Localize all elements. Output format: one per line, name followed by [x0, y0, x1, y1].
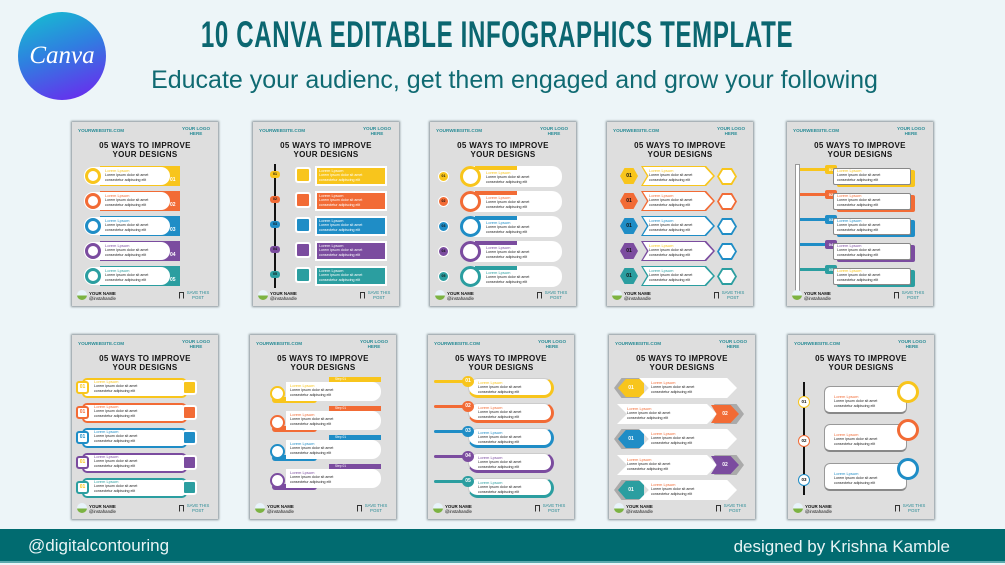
- card 9: Lorem Lpsum: [627, 406, 651, 411]
- card 7: YOURWEBSITE.COM: [256, 341, 302, 346]
- card 9: SAVE THIS POST: [724, 503, 746, 513]
- card 5: consectetur adipiscing elit: [837, 278, 878, 282]
- card 8: 05: [465, 478, 471, 484]
- card 1: consectetur adipiscing elit: [105, 278, 146, 282]
- card 2: 02: [273, 197, 277, 201]
- card 1: @instahandle: [89, 296, 116, 301]
- card 5: consectetur adipiscing elit: [837, 178, 878, 182]
- card 2: YOURWEBSITE.COM: [259, 128, 305, 133]
- card 1: Lorem ipsum dolor sit amet: [105, 223, 148, 227]
- card 3: SAVE THIS POST: [545, 290, 567, 300]
- card 6: Lorem Lpsum: [94, 404, 118, 409]
- footer: handle: @digitalcontouring: [28, 536, 169, 555]
- card 3: 03: [442, 224, 445, 228]
- card 3: consectetur adipiscing elit: [486, 205, 527, 209]
- card 6: @instahandle: [89, 509, 116, 514]
- card 6: Lorem Lpsum: [94, 379, 118, 384]
- card 4: consectetur adipiscing elit: [649, 228, 690, 232]
- card 10: YOUR LOGO HERE: [898, 339, 926, 349]
- card 3: Lorem ipsum dolor sit amet: [486, 275, 529, 279]
- card 1: YOUR DESIGNS: [113, 150, 177, 159]
- card 1: Lorem ipsum dolor sit amet: [105, 198, 148, 202]
- card 2: YOUR DESIGNS: [294, 150, 358, 159]
- card 2: Lorem ipsum dolor sit amet: [319, 198, 362, 202]
- card 3: Lorem ipsum dolor sit amet: [486, 250, 529, 254]
- card 1: [72, 122, 218, 306]
- card 2: [253, 122, 399, 306]
- card 9: Lorem ipsum dolor sit amet: [651, 487, 694, 491]
- card 5: 01: [829, 167, 833, 172]
- card 9: Lorem Lpsum: [627, 457, 651, 462]
- card 7: Lorem ipsum dolor sit amet: [290, 417, 333, 421]
- card 9: Lorem ipsum dolor sit amet: [627, 411, 670, 415]
- card 5: consectetur adipiscing elit: [837, 253, 878, 257]
- card 1: SAVE THIS POST: [187, 290, 209, 300]
- card 8: consectetur adipiscing elit: [478, 465, 519, 469]
- card 3: consectetur adipiscing elit: [486, 230, 527, 234]
- card 5: @instahandle: [804, 296, 831, 301]
- card 8: Lorem Lpsum: [478, 380, 502, 385]
- card 1: Lorem ipsum dolor sit amet: [105, 248, 148, 252]
- card 7: Step 01: [335, 435, 346, 439]
- card 3: 05: [442, 274, 445, 278]
- card 10: Lorem Lpsum: [834, 394, 858, 399]
- card 5: Lorem ipsum dolor sit amet: [837, 223, 880, 227]
- card 2: 05: [273, 272, 277, 276]
- card 6: YOURWEBSITE.COM: [78, 341, 124, 346]
- card 2: Lorem ipsum dolor sit amet: [319, 248, 362, 252]
- card 6: consectetur adipiscing elit: [94, 439, 135, 443]
- card 3: 02: [442, 199, 445, 203]
- card 4: 01: [626, 173, 632, 179]
- card 6: Lorem ipsum dolor sit amet: [94, 384, 137, 388]
- card 7: Lorem Lpsum: [290, 412, 314, 417]
- card 8: consectetur adipiscing elit: [478, 440, 519, 444]
- card 2: consectetur adipiscing elit: [319, 178, 360, 182]
- card 5: YOURWEBSITE.COM: [793, 128, 839, 133]
- card 5: Lorem ipsum dolor sit amet: [837, 248, 880, 252]
- card 3: Lorem Lpsum: [486, 170, 510, 175]
- card 7: consectetur adipiscing elit: [290, 480, 331, 484]
- card 3: [430, 122, 576, 306]
- card 10: YOUR DESIGNS: [829, 363, 893, 372]
- card 4: Lorem ipsum dolor sit amet: [649, 223, 692, 227]
- card 7: YOUR DESIGNS: [291, 363, 355, 372]
- card 9: YOUR NAME: [626, 504, 653, 509]
- card 7: Lorem Lpsum: [290, 441, 314, 446]
- card 9: [609, 335, 755, 519]
- card 3: Lorem Lpsum: [486, 220, 510, 225]
- card 6: 01: [80, 484, 85, 490]
- card 10: [788, 335, 934, 519]
- card 6: consectetur adipiscing elit: [94, 464, 135, 468]
- card 10: Lorem Lpsum: [834, 432, 858, 437]
- card 3: Lorem Lpsum: [486, 245, 510, 250]
- card 10: 02: [801, 438, 806, 443]
- card 2: Lorem ipsum dolor sit amet: [319, 273, 362, 277]
- card 5: Lorem ipsum dolor sit amet: [837, 173, 880, 177]
- card 4: 05 WAYS TO IMPROVE: [634, 141, 726, 150]
- card 8: YOUR NAME: [445, 504, 472, 509]
- card 7: consectetur adipiscing elit: [290, 393, 331, 397]
- card 8: Lorem ipsum dolor sit amet: [478, 460, 521, 464]
- card 5: SAVE THIS POST: [902, 290, 924, 300]
- card 2: 03: [273, 222, 277, 226]
- card 3: Lorem Lpsum: [486, 195, 510, 200]
- card 4: Lorem ipsum dolor sit amet: [649, 248, 692, 252]
- card 4: YOUR DESIGNS: [648, 150, 712, 159]
- card 2: Lorem ipsum dolor sit amet: [319, 173, 362, 177]
- card 8: 05 WAYS TO IMPROVE: [455, 354, 547, 363]
- card 6: 01: [80, 409, 85, 415]
- card 7: YOUR LOGO HERE: [360, 339, 388, 349]
- card 8: SAVE THIS POST: [543, 503, 565, 513]
- card 4: consectetur adipiscing elit: [649, 203, 690, 207]
- card 4: Lorem ipsum dolor sit amet: [649, 198, 692, 202]
- card 5: Lorem ipsum dolor sit amet: [837, 198, 880, 202]
- card 8: Lorem ipsum dolor sit amet: [478, 435, 521, 439]
- card 3: 05 WAYS TO IMPROVE: [457, 141, 549, 150]
- card 7: consectetur adipiscing elit: [290, 422, 331, 426]
- card 8: consectetur adipiscing elit: [478, 415, 519, 419]
- card 3: @instahandle: [447, 296, 474, 301]
- card 5: 02: [829, 192, 833, 197]
- card 5: Lorem Lpsum: [837, 218, 861, 223]
- card 6: YOUR LOGO HERE: [182, 339, 210, 349]
- icon: canva logo: Canva: [29, 42, 95, 69]
- card 9: YOURWEBSITE.COM: [615, 341, 661, 346]
- card 9: 01: [628, 436, 634, 442]
- card 1: 02: [170, 202, 176, 208]
- card 8: Lorem Lpsum: [478, 480, 502, 485]
- card 8: 04: [465, 453, 471, 459]
- card 3: consectetur adipiscing elit: [486, 255, 527, 259]
- card 4: 01: [626, 223, 632, 229]
- card 1: 03: [170, 227, 176, 233]
- card 10: @instahandle: [805, 509, 832, 514]
- card 4: Lorem Lpsum: [649, 218, 673, 223]
- card 9: Lorem ipsum dolor sit amet: [627, 462, 670, 466]
- card 8: YOUR LOGO HERE: [538, 339, 566, 349]
- card 9: Lorem Lpsum: [651, 431, 675, 436]
- card 10: Lorem ipsum dolor sit amet: [834, 399, 877, 403]
- card 5: YOUR NAME: [804, 291, 831, 296]
- card 3: YOUR NAME: [447, 291, 474, 296]
- card 4: Lorem Lpsum: [649, 193, 673, 198]
- card 10: YOUR NAME: [805, 504, 832, 509]
- card 5: YOUR LOGO HERE: [897, 126, 925, 136]
- card 6: Lorem ipsum dolor sit amet: [94, 409, 137, 413]
- card 4: YOUR NAME: [624, 291, 651, 296]
- card 6: Lorem Lpsum: [94, 479, 118, 484]
- card 1: consectetur adipiscing elit: [105, 228, 146, 232]
- card 1: YOUR NAME: [89, 291, 116, 296]
- card 2: Lorem ipsum dolor sit amet: [319, 223, 362, 227]
- card 5: consectetur adipiscing elit: [837, 203, 878, 207]
- card 7: Lorem ipsum dolor sit amet: [290, 388, 333, 392]
- card 10: Lorem ipsum dolor sit amet: [834, 476, 877, 480]
- card 9: 01: [628, 487, 634, 493]
- card 1: YOURWEBSITE.COM: [78, 128, 124, 133]
- card 3: 04: [442, 249, 445, 253]
- card 9: Lorem Lpsum: [651, 482, 675, 487]
- card 5: 05: [829, 267, 833, 272]
- card 1: consectetur adipiscing elit: [105, 253, 146, 257]
- card 9: YOUR LOGO HERE: [719, 339, 747, 349]
- card 1: consectetur adipiscing elit: [105, 203, 146, 207]
- card 6: 01: [80, 434, 85, 440]
- card 7: Step 01: [335, 377, 346, 381]
- card 4: 01: [626, 248, 632, 254]
- card 2: YOUR LOGO HERE: [363, 126, 391, 136]
- card 2: consectetur adipiscing elit: [319, 253, 360, 257]
- card 10: Lorem Lpsum: [834, 471, 858, 476]
- card 5: Lorem ipsum dolor sit amet: [837, 273, 880, 277]
- card 8: @instahandle: [445, 509, 472, 514]
- card 10: YOURWEBSITE.COM: [794, 341, 840, 346]
- card 6: 01: [80, 459, 85, 465]
- card 2: 04: [273, 247, 277, 251]
- card 8: 01: [465, 378, 471, 384]
- card 4: Lorem Lpsum: [649, 243, 673, 248]
- card 6: consectetur adipiscing elit: [94, 489, 135, 493]
- card 3: Lorem ipsum dolor sit amet: [486, 200, 529, 204]
- card 1: YOUR LOGO HERE: [182, 126, 210, 136]
- subtitle: Educate your audienc, get them engaged and grow your following: [151, 66, 878, 94]
- card 8: consectetur adipiscing elit: [478, 490, 519, 494]
- card 4: consectetur adipiscing elit: [649, 253, 690, 257]
- card 6: Lorem ipsum dolor sit amet: [94, 459, 137, 463]
- card 6: YOUR DESIGNS: [113, 363, 177, 372]
- card 7: consectetur adipiscing elit: [290, 451, 331, 455]
- card 2: Lorem Lpsum: [319, 193, 343, 198]
- card 7: @instahandle: [267, 509, 294, 514]
- card 1: Lorem Lpsum: [105, 268, 129, 273]
- card 9: 01: [628, 385, 634, 391]
- card 2: SAVE THIS POST: [368, 290, 390, 300]
- card 4: Lorem ipsum dolor sit amet: [649, 173, 692, 177]
- card 8: 02: [465, 403, 471, 409]
- card 6: 05 WAYS TO IMPROVE: [99, 354, 191, 363]
- card 6: Lorem Lpsum: [94, 429, 118, 434]
- card 6: consectetur adipiscing elit: [94, 389, 135, 393]
- card 5: 03: [829, 217, 833, 222]
- card 9: consectetur adipiscing elit: [627, 467, 668, 471]
- card 3: consectetur adipiscing elit: [486, 280, 527, 284]
- card 3: Lorem ipsum dolor sit amet: [486, 175, 529, 179]
- card 7: Step 01: [335, 464, 346, 468]
- card 8: YOURWEBSITE.COM: [434, 341, 480, 346]
- card 2: Lorem Lpsum: [319, 268, 343, 273]
- card 6: Lorem Lpsum: [94, 454, 118, 459]
- card 10: 01: [801, 399, 806, 404]
- card 4: @instahandle: [624, 296, 651, 301]
- card 9: consectetur adipiscing elit: [651, 441, 692, 445]
- card 4: 01: [626, 273, 632, 279]
- card 9: 02: [722, 411, 728, 417]
- card 1: consectetur adipiscing elit: [105, 178, 146, 182]
- card 1: 04: [170, 252, 176, 258]
- card 1: 01: [170, 177, 176, 183]
- card 3: consectetur adipiscing elit: [486, 180, 527, 184]
- card 4: YOURWEBSITE.COM: [613, 128, 659, 133]
- card 6: YOUR NAME: [89, 504, 116, 509]
- card 1: 05: [170, 277, 176, 283]
- card 10: consectetur adipiscing elit: [834, 442, 875, 446]
- card 5: YOUR DESIGNS: [828, 150, 892, 159]
- card 7: SAVE THIS POST: [365, 503, 387, 513]
- card 9: consectetur adipiscing elit: [651, 492, 692, 496]
- card 4: consectetur adipiscing elit: [649, 278, 690, 282]
- card 1: Lorem Lpsum: [105, 168, 129, 173]
- card 6: [72, 335, 218, 519]
- card 4: 01: [626, 198, 632, 204]
- card 2: Lorem Lpsum: [319, 243, 343, 248]
- card 9: consectetur adipiscing elit: [627, 416, 668, 420]
- card 7: [250, 335, 396, 519]
- card 2: consectetur adipiscing elit: [319, 228, 360, 232]
- card 7: 05 WAYS TO IMPROVE: [277, 354, 369, 363]
- card 4: YOUR LOGO HERE: [717, 126, 745, 136]
- title: 10 CANVA EDITABLE INFOGRAPHICS TEMPLATE: [201, 14, 793, 55]
- card 7: Lorem ipsum dolor sit amet: [290, 475, 333, 479]
- card 5: Lorem Lpsum: [837, 268, 861, 273]
- card 1: Lorem ipsum dolor sit amet: [105, 273, 148, 277]
- card 10: 03: [801, 477, 806, 482]
- card 4: consectetur adipiscing elit: [649, 178, 690, 182]
- card 6: Lorem ipsum dolor sit amet: [94, 434, 137, 438]
- card 3: Lorem Lpsum: [486, 270, 510, 275]
- footer band: [0, 529, 1005, 563]
- card 4: Lorem Lpsum: [649, 268, 673, 273]
- card 9: YOUR DESIGNS: [650, 363, 714, 372]
- card 8: YOUR DESIGNS: [469, 363, 533, 372]
- card 3: YOURWEBSITE.COM: [436, 128, 482, 133]
- card 8: Lorem ipsum dolor sit amet: [478, 385, 521, 389]
- card 2: YOUR NAME: [270, 291, 297, 296]
- card 7: Lorem ipsum dolor sit amet: [290, 446, 333, 450]
- card 9: 02: [722, 462, 728, 468]
- card 8: Lorem Lpsum: [478, 455, 502, 460]
- card 8: Lorem Lpsum: [478, 405, 502, 410]
- card 5: Lorem Lpsum: [837, 243, 861, 248]
- card 9: Lorem ipsum dolor sit amet: [651, 385, 694, 389]
- card 5: consectetur adipiscing elit: [837, 228, 878, 232]
- card 8: 03: [465, 428, 471, 434]
- card 5: 05 WAYS TO IMPROVE: [814, 141, 906, 150]
- card 8: Lorem ipsum dolor sit amet: [478, 485, 521, 489]
- card 9: Lorem Lpsum: [651, 380, 675, 385]
- card 6: Lorem ipsum dolor sit amet: [94, 484, 137, 488]
- card 7: Lorem Lpsum: [290, 383, 314, 388]
- card 6: SAVE THIS POST: [187, 503, 209, 513]
- card 9: consectetur adipiscing elit: [651, 390, 692, 394]
- card 3: 01: [442, 174, 445, 178]
- card 10: consectetur adipiscing elit: [834, 481, 875, 485]
- card 1: Lorem ipsum dolor sit amet: [105, 173, 148, 177]
- card 9: 05 WAYS TO IMPROVE: [636, 354, 728, 363]
- card 9: Lorem ipsum dolor sit amet: [651, 436, 694, 440]
- card 2: consectetur adipiscing elit: [319, 203, 360, 207]
- card 8: Lorem Lpsum: [478, 430, 502, 435]
- card 2: @instahandle: [270, 296, 297, 301]
- card 5: Lorem Lpsum: [837, 193, 861, 198]
- icon: canva logo: [18, 12, 106, 100]
- card 3: YOUR DESIGNS: [471, 150, 535, 159]
- card 10: SAVE THIS POST: [903, 503, 925, 513]
- card 1: 05 WAYS TO IMPROVE: [99, 141, 191, 150]
- card 3: YOUR LOGO HERE: [540, 126, 568, 136]
- card 7: YOUR NAME: [267, 504, 294, 509]
- card 4: [607, 122, 753, 306]
- card 7: Step 01: [335, 406, 346, 410]
- card 10: 05 WAYS TO IMPROVE: [815, 354, 907, 363]
- card 6: 01: [80, 384, 85, 390]
- card 5: 04: [829, 242, 833, 247]
- card 1: Lorem Lpsum: [105, 193, 129, 198]
- card 2: Lorem Lpsum: [319, 218, 343, 223]
- card 2: 01: [273, 172, 277, 176]
- card 9: @instahandle: [626, 509, 653, 514]
- card 8: Lorem ipsum dolor sit amet: [478, 410, 521, 414]
- footer: designer credit: designed by Krishna Kamble: [734, 537, 950, 556]
- card 2: Lorem Lpsum: [319, 168, 343, 173]
- card 5: Lorem Lpsum: [837, 168, 861, 173]
- card 1: Lorem Lpsum: [105, 243, 129, 248]
- card 1: Lorem Lpsum: [105, 218, 129, 223]
- card 7: Lorem Lpsum: [290, 470, 314, 475]
- card 2: 05 WAYS TO IMPROVE: [280, 141, 372, 150]
- card 2: consectetur adipiscing elit: [319, 278, 360, 282]
- card 4: SAVE THIS POST: [722, 290, 744, 300]
- card 8: [428, 335, 574, 519]
- card 6: consectetur adipiscing elit: [94, 414, 135, 418]
- card 4: Lorem ipsum dolor sit amet: [649, 273, 692, 277]
- card 3: Lorem ipsum dolor sit amet: [486, 225, 529, 229]
- card 5: [787, 122, 933, 306]
- card 10: consectetur adipiscing elit: [834, 404, 875, 408]
- card 4: Lorem Lpsum: [649, 168, 673, 173]
- card 10: Lorem ipsum dolor sit amet: [834, 437, 877, 441]
- card 8: consectetur adipiscing elit: [478, 390, 519, 394]
